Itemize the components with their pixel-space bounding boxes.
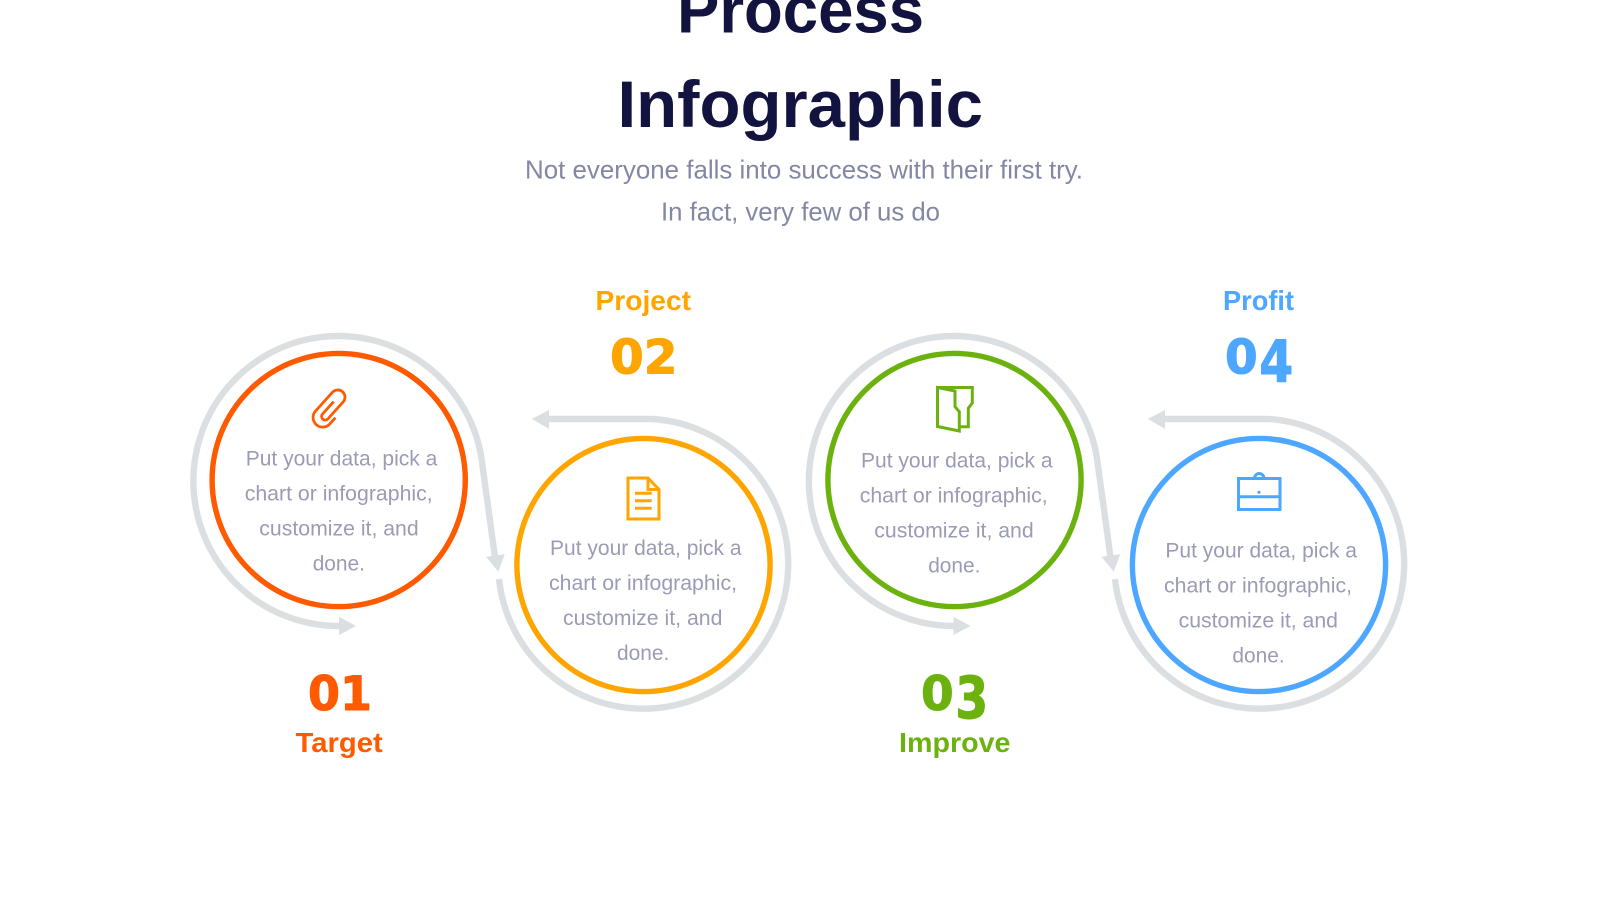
ring: step 01 [212,353,465,607]
subtitle: Not everyone falls into success with their first try. [525,154,1083,184]
number: 02: 02 [610,330,678,386]
body text: step 01: done. [313,552,365,576]
body text: step 02: customize it, and [563,606,722,630]
body text: step 04: customize it, and [1179,608,1338,632]
panel: step 01 target [193,336,505,758]
number: 04: 4 [1259,328,1293,396]
label: Project: Project [596,285,691,316]
number: 04: 0 [1225,330,1258,386]
arrow: step 04 loop [1115,410,1404,709]
body text: step 04: Put your data, pick a [1165,538,1357,562]
panel: step 03 improve [809,336,1120,758]
body text: step 01: customize it, and [259,517,419,541]
ring: step 04 [1132,438,1386,692]
title [618,0,983,141]
body text: step 03: customize it, and [874,518,1034,542]
body text: step 04 [1164,538,1357,667]
label: Improve: Improve [899,727,1010,758]
icon: document [628,478,659,519]
subtitle: In fact, very few of us do [661,196,940,226]
arrow: step 02 loop [499,410,788,709]
body text: step 01 [245,447,437,576]
icon: folder [938,388,972,431]
label: Profit: Profit [1223,285,1294,316]
body text: step 01: chart or infographic, [245,482,433,506]
body text: step 04: done. [1232,643,1285,667]
subtitle [525,154,1083,226]
body text: step 03: chart or infographic, [860,483,1048,507]
number: 01: 01 [308,667,372,722]
number: 03: 3 [955,664,988,732]
panel: step 04 profit [1115,285,1404,709]
arrow: step 01 loop [193,336,505,635]
body text: step 03 [860,448,1053,577]
body text: step 01: Put your data, pick a [246,447,437,471]
label: Target: Target [296,727,383,758]
body text: step 02 [549,536,742,665]
body text: step 03: done. [928,553,980,577]
body text: step 02: Put your data, pick a [550,536,742,560]
icon: paperclip [309,387,351,431]
ring: step 02 [517,438,770,692]
body text: step 03: Put your data, pick a [861,448,1053,472]
body text: step 02: done. [617,641,669,665]
panel: step 02 project [499,285,788,709]
body text: step 04: chart or infographic, [1164,573,1352,597]
body text: step 02: chart or infographic, [549,571,737,595]
number: 03: 0 [921,667,954,722]
icon: briefcase [1238,473,1280,510]
arrow: step 03 loop [809,336,1120,635]
ring: step 03 [828,353,1081,607]
title: Infographic [618,67,983,141]
